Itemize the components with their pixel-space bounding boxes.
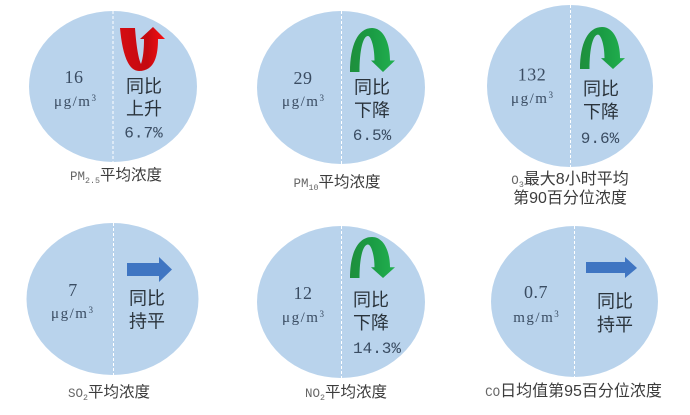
label: PM10 average: PM [294, 177, 309, 191]
text: year on year: 同比 [353, 290, 389, 310]
panel: PM10 [257, 11, 425, 193]
text: down: 下降 [583, 102, 619, 122]
circle: O3 [487, 5, 653, 167]
value: PM2.5 concentration: 16 [64, 67, 84, 87]
text: year on year: 同比 [597, 292, 633, 312]
circle: PM2.5 [29, 11, 197, 162]
panel: CO [485, 226, 662, 400]
unit: PM10: μg/m [282, 94, 319, 110]
label: O3 max 8-hour average 90th percentile [511, 170, 629, 207]
percentage: PM10 change: 6.5% [353, 127, 392, 145]
percentage: O3 change: 9.6% [581, 130, 620, 148]
label: NO2 average: NO [305, 387, 320, 401]
panel: NO2 [257, 226, 425, 403]
label: O3 max 8-hour average 90th percentile: 3 [519, 181, 524, 190]
unit: SO2: 3 [88, 305, 93, 315]
icon: green falling arrow [350, 237, 395, 278]
text: flat: 持平 [129, 312, 165, 332]
unit: PM2.5: 3 [91, 93, 96, 103]
label: NO2 average: 平均浓度 [325, 383, 387, 401]
text: down: 下降 [353, 313, 389, 333]
label: O3 max 8-hour average 90th percentile: 最大8小时平均 [524, 170, 629, 188]
circle: SO2 [26, 223, 198, 375]
icon: green falling arrow [350, 28, 395, 72]
icon: green falling arrow [580, 27, 625, 69]
unit: O3: 3 [548, 90, 553, 100]
value: PM10 concentration: 29 [294, 68, 312, 88]
panel: PM2.5 [29, 11, 197, 186]
label: PM10 average: 10 [309, 184, 318, 193]
text: year on year: 同比 [126, 76, 162, 96]
icon: blue flat arrow [586, 257, 637, 278]
label: SO2 average: 2 [83, 394, 88, 403]
panel: SO2 [26, 223, 198, 403]
text: down: 下降 [354, 100, 390, 120]
label: SO2 average: 平均浓度 [88, 383, 150, 401]
icon: blue flat arrow [127, 257, 172, 282]
unit: NO2: 3 [319, 309, 324, 319]
unit: CO: 3 [554, 309, 559, 319]
percentage: NO2 change: 14.3% [353, 340, 401, 358]
label: PM2.5 average: 平均浓度 [100, 166, 162, 184]
percentage: PM2.5 change: 6.7% [124, 124, 163, 142]
label: PM2.5 average: PM [70, 170, 85, 184]
circle: PM10 [257, 11, 425, 164]
value: NO2 concentration: 12 [294, 283, 312, 303]
unit: PM10: 3 [319, 93, 324, 103]
value: O3 concentration: 132 [518, 64, 546, 84]
label: O3 max 8-hour average 90th percentile: O [511, 174, 519, 188]
unit: CO: mg/m [513, 310, 554, 326]
label: PM2.5 average: 2.5 [85, 177, 100, 186]
panel: O3 [487, 5, 653, 207]
unit: PM2.5: μg/m [54, 94, 91, 110]
unit: O3: μg/m [511, 91, 548, 107]
label: NO2 average: 2 [320, 394, 325, 403]
text: up: 上升 [126, 99, 162, 119]
text: year on year: 同比 [129, 288, 165, 308]
circle: CO [491, 226, 658, 377]
label: SO2 average: SO [68, 387, 83, 401]
circle: NO2 [257, 226, 425, 378]
label: PM10 average: 平均浓度 [318, 173, 380, 191]
label: O3 max 8-hour average 90th percentile: 第90百分位浓度 [513, 189, 627, 207]
text: flat: 持平 [597, 315, 633, 335]
value: SO2 concentration: 7 [68, 280, 78, 300]
label: CO daily mean 95th percentile: CO日均值第95百分位浓度 [485, 382, 662, 400]
text: year on year: 同比 [354, 78, 390, 98]
icon: red rising arrow [120, 27, 165, 71]
value: CO concentration: 0.7 [524, 282, 548, 302]
unit: SO2: μg/m [51, 306, 88, 322]
text: year on year: 同比 [583, 79, 619, 99]
unit: NO2: μg/m [282, 310, 319, 326]
